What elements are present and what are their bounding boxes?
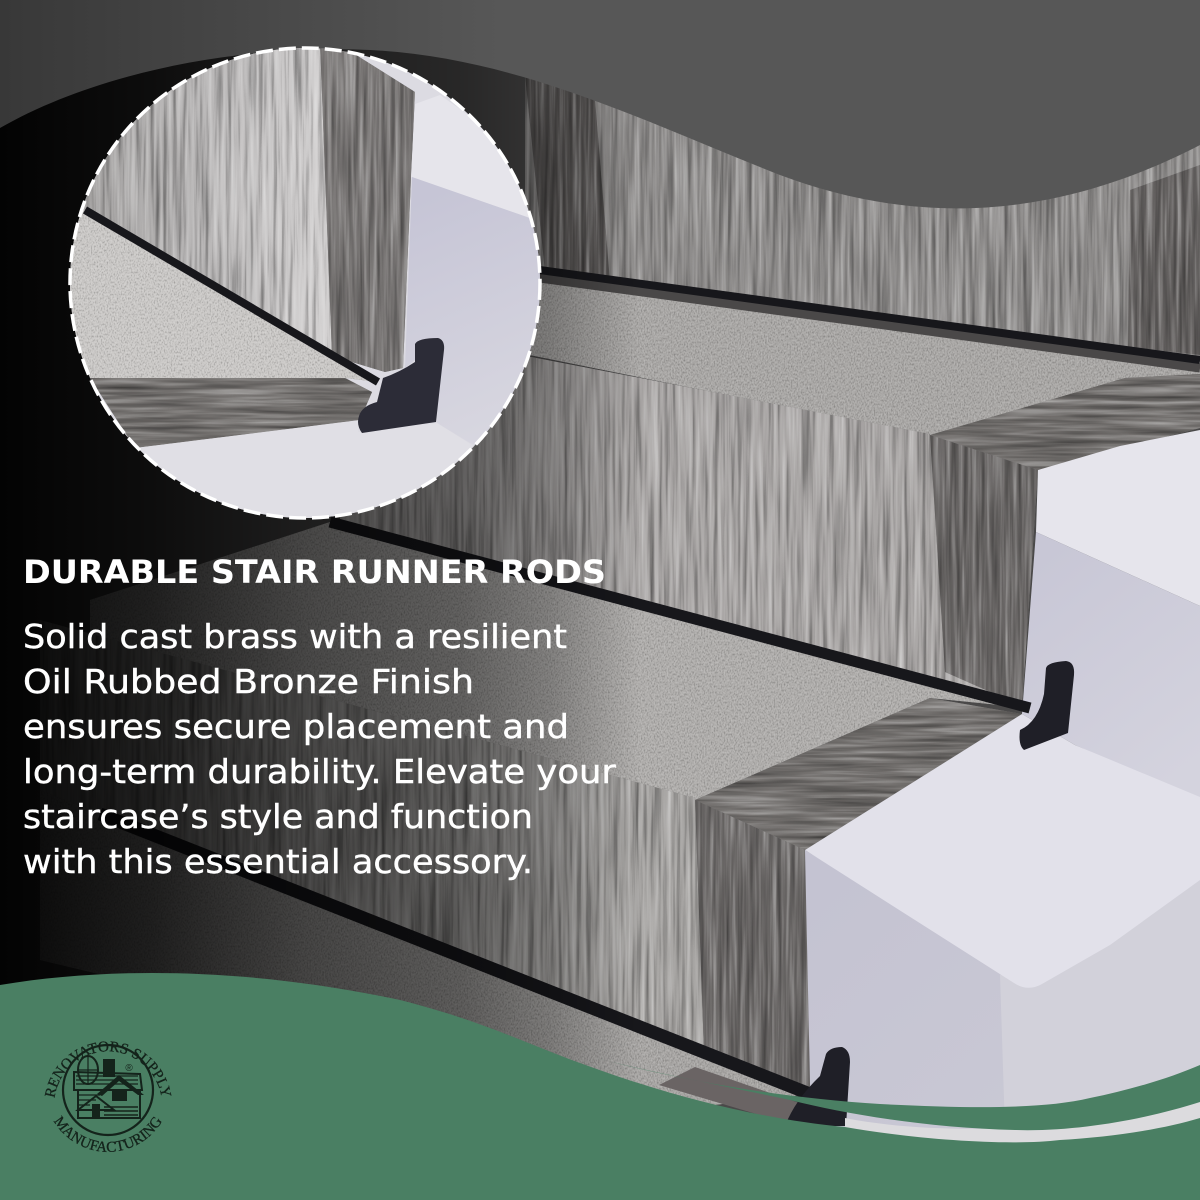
inset stair rod xyxy=(85,210,378,382)
logo ring xyxy=(63,1045,153,1135)
lower white step xyxy=(805,714,1200,1130)
upper white step xyxy=(1022,430,1200,800)
body text: Oil Rubbed Bronze Finish xyxy=(23,662,474,701)
logo: Renovators Supply Manufacturing xyxy=(44,1041,172,1152)
floor carpet xyxy=(40,790,810,1110)
first tread carpet xyxy=(480,265,1200,436)
logo registered mark: ® xyxy=(125,1063,133,1074)
second riser carpet xyxy=(40,620,810,1094)
body text: Solid cast brass with a resilient xyxy=(23,617,567,656)
first riser carpet xyxy=(340,320,1030,708)
inset runner side strip xyxy=(320,42,415,372)
heading: DURABLE STAIR RUNNER RODS xyxy=(23,553,606,591)
lower rod bracket xyxy=(785,1047,850,1126)
inset carpet wall xyxy=(84,48,332,350)
circular detail inset photo xyxy=(60,40,560,530)
top dark wave band xyxy=(0,0,1200,208)
body text: with this essential accessory. xyxy=(23,842,533,881)
inset runner tread strip xyxy=(90,378,372,448)
inset rod bracket xyxy=(358,338,444,433)
light stripe xyxy=(845,1095,1200,1144)
body text: long-term durability. Elevate your xyxy=(23,752,616,791)
bottom green wave panel xyxy=(0,973,1200,1200)
top stair rod shadow and rod xyxy=(525,268,1200,368)
green swoosh xyxy=(592,1057,1200,1130)
body text: staircase’s style and function xyxy=(23,797,533,836)
middle stair rod xyxy=(330,522,1030,708)
inset white floor xyxy=(140,420,474,518)
dark left gradient overlay xyxy=(0,0,640,1200)
logo top arc text: RENOVATORS SUPPLY xyxy=(44,1041,172,1098)
body text xyxy=(23,617,616,881)
inset upper white step xyxy=(411,96,529,218)
inset white riser xyxy=(405,177,540,432)
main green wave xyxy=(0,973,1200,1200)
upper riser borders xyxy=(525,75,1200,355)
logo house icon xyxy=(74,1056,144,1118)
inset white background xyxy=(60,40,550,530)
middle rod bracket xyxy=(1020,661,1074,750)
inset tread carpet xyxy=(70,210,368,381)
inset dashed border xyxy=(70,48,540,518)
body text: ensures secure placement and xyxy=(23,707,569,746)
upper riser carpet xyxy=(525,0,1200,362)
second step runner border xyxy=(695,698,1022,1094)
second tread carpet xyxy=(90,522,1030,800)
lower stair rod xyxy=(100,814,810,1094)
logo bottom arc text: MANUFACTURING xyxy=(54,1115,162,1152)
first step runner border xyxy=(930,374,1200,706)
